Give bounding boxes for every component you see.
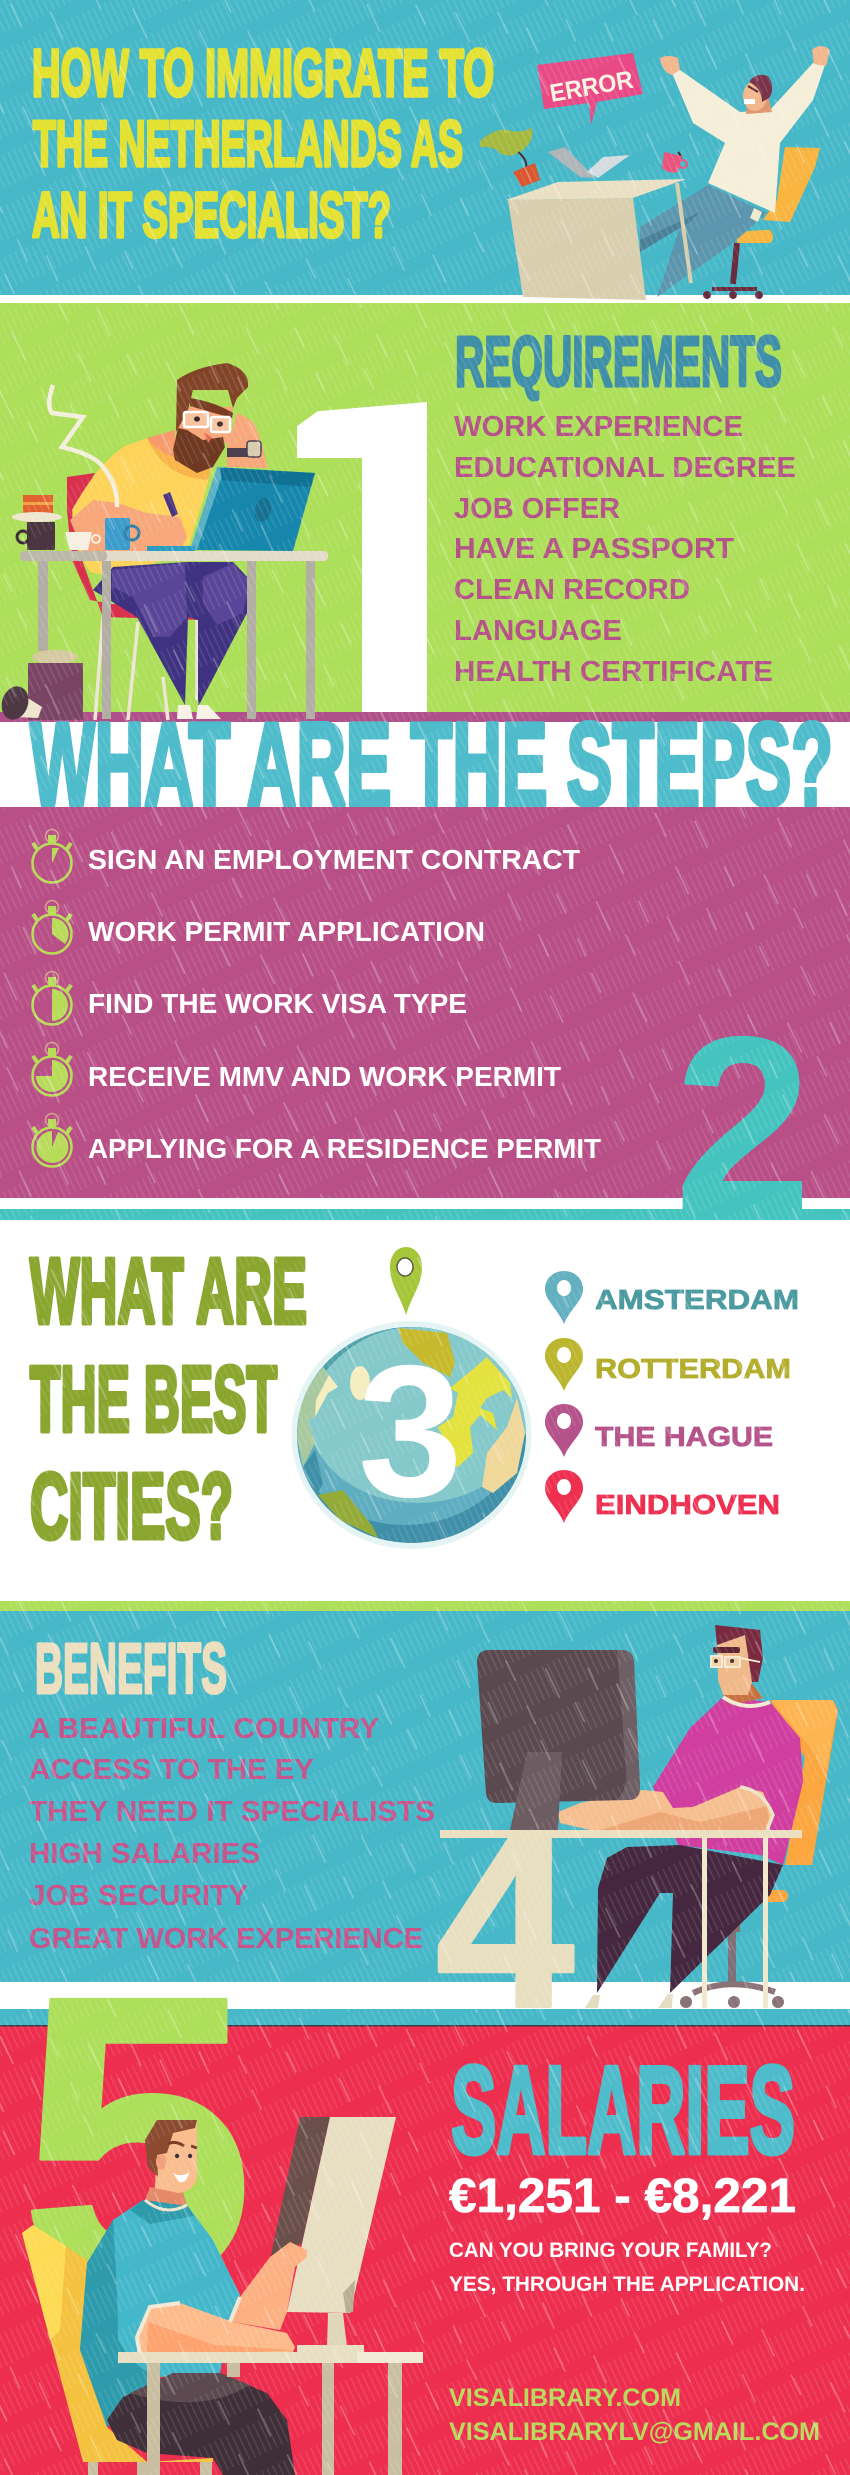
family question (449, 2239, 805, 2296)
list: requirements: CLEAN RECORD (454, 574, 690, 606)
contact details: VISALIBRARYLV@GMAIL.COM (449, 2418, 820, 2446)
title: THE NETHERLANDS AS (33, 107, 463, 180)
big number 1: 1 (270, 350, 470, 797)
step 1 stopwatch (32, 830, 72, 882)
heading: what are the best cities: THE BEST (30, 1347, 277, 1451)
big number 3: 3 (358, 1326, 463, 1536)
big number 5: 5 (20, 1911, 254, 2369)
family question: CAN YOU BRING YOUR FAMILY? (449, 2239, 772, 2262)
city: Rotterdam: ROTTERDAM (595, 1353, 791, 1384)
title (32, 36, 494, 251)
step 5 text: APPLYING FOR A RESIDENCE PERMIT (88, 1133, 601, 1164)
city: Amsterdam: AMSTERDAM (595, 1284, 799, 1315)
city: Eindhoven: EINDHOVEN (595, 1489, 780, 1520)
city: Eindhoven (545, 1470, 780, 1523)
big number 2: 2 (674, 984, 812, 1262)
step 2 text: WORK PERMIT APPLICATION (88, 916, 485, 947)
city: Rotterdam (545, 1338, 791, 1391)
step 3 stopwatch (32, 972, 72, 1024)
city: Amsterdam (545, 1271, 799, 1324)
family question: YES, THROUGH THE APPLICATION. (449, 2273, 805, 2296)
heading: what are the best cities: WHAT ARE (30, 1239, 307, 1343)
illustration: waste bin (0, 650, 83, 723)
panel: salaries (0, 1911, 850, 2475)
list: benefits: THEY NEED IT SPECIALISTS (29, 1796, 435, 1828)
illustration: desk (118, 2352, 423, 2475)
list: requirements (454, 411, 796, 688)
illustration: flying plant (480, 128, 540, 187)
list: benefits: JOB SECURITY (29, 1880, 248, 1912)
list: benefits: GREAT WORK EXPERIENCE (29, 1923, 423, 1955)
panel: requirements (0, 303, 850, 722)
list: benefits: ACCESS TO THE EY (29, 1754, 314, 1786)
step 5 stopwatch (32, 1114, 72, 1166)
step 4 text: RECEIVE MMV AND WORK PERMIT (88, 1061, 561, 1092)
contact details: VISALIBRARY.COM (449, 2384, 681, 2412)
title: AN IT SPECIALIST? (32, 179, 391, 251)
list: requirements: HEALTH CERTIFICATE (454, 656, 773, 688)
step 2 stopwatch (32, 900, 72, 954)
panel: steps (0, 807, 850, 1262)
icon: green map pin (390, 1247, 422, 1315)
list: requirements: HAVE A PASSPORT (454, 533, 734, 565)
illustration: man throwing arms up (640, 46, 830, 299)
heading: what are the best cities: CITIES? (30, 1454, 233, 1558)
illustration: desk with cups (12, 385, 328, 719)
list: requirements: JOB OFFER (454, 493, 620, 525)
globe with number 3 (287, 1319, 535, 1550)
illustration: bearded man at laptop (67, 363, 315, 720)
illustration: desk (440, 1830, 802, 2008)
contact details (449, 2384, 820, 2446)
city: The Hague: THE HAGUE (595, 1421, 773, 1452)
illustration: error speech bubble (537, 53, 643, 125)
panel: header (0, 0, 850, 303)
list: requirements: WORK EXPERIENCE (454, 411, 743, 443)
list: benefits: A BEAUTIFUL COUNTRY (29, 1713, 379, 1745)
step 4 stopwatch (32, 1042, 72, 1096)
panel: benefits (0, 1601, 850, 2059)
illustration: desk (506, 179, 691, 300)
heading: benefits: BENEFITS (35, 1630, 227, 1709)
panel: best cities (28, 1247, 798, 1549)
step 3 text: FIND THE WORK VISA TYPE (88, 988, 467, 1019)
illustration: error speech bubble: ERROR (548, 66, 635, 108)
step 1 text: SIGN AN EMPLOYMENT CONTRACT (88, 844, 580, 875)
illustration: flying laptop (548, 147, 630, 178)
title: HOW TO IMMIGRATE TO (32, 36, 494, 111)
illustration: man at monitor (477, 1625, 838, 2008)
big number 4: 4 (436, 1781, 574, 2059)
list: benefits: HIGH SALARIES (29, 1838, 260, 1870)
salary range: €1,251 - €8,221 (449, 2170, 796, 2223)
list: requirements: LANGUAGE (454, 615, 622, 647)
illustration: flying mug (662, 152, 687, 172)
list: benefits (29, 1713, 435, 1955)
illustration: smiling man at monitor (22, 2117, 396, 2475)
list: requirements: EDUCATIONAL DEGREE (454, 452, 796, 484)
city: The Hague (545, 1404, 773, 1457)
heading: what are the best cities (30, 1239, 307, 1558)
